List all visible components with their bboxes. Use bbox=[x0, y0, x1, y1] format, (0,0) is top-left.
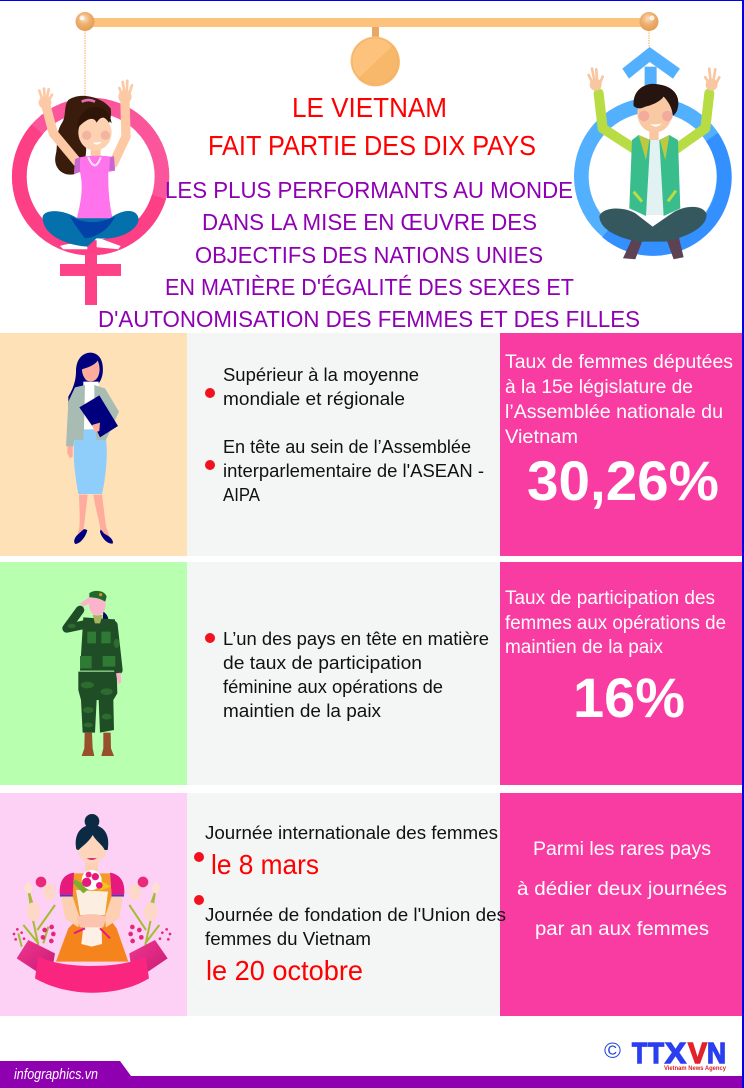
callout: two days: Parmi les rares pays bbox=[533, 839, 711, 860]
bullet text: peacekeeping: maintien de la paix bbox=[223, 701, 381, 721]
callout: 30,26%: Vietnam bbox=[505, 427, 578, 448]
title lines: purple: OBJECTIFS DES NATIONS UNIES bbox=[195, 242, 543, 268]
callout: 30,26%: l’Assemblée nationale du bbox=[505, 402, 723, 423]
icon: businesswoman bbox=[66, 353, 119, 544]
bullet text: peacekeeping: féminine aux opérations de bbox=[223, 677, 443, 697]
panel: peacekeeping bbox=[0, 562, 742, 785]
text: women's days dates: Journée de fondation de l'Union des bbox=[205, 905, 506, 925]
bullet text: parliament bbox=[205, 365, 484, 505]
title lines: purple: DANS LA MISE EN ŒUVRE DES bbox=[202, 209, 537, 235]
bullet text: parliament: AIPA bbox=[223, 485, 260, 505]
icon: man in male symbol bbox=[581, 47, 724, 259]
callout: two days: par an aux femmes bbox=[535, 919, 709, 940]
footer band bbox=[0, 1061, 742, 1088]
text: women's days dates: Journée internationale des femmes bbox=[205, 823, 498, 843]
bullet text: peacekeeping: L’un des pays en tête en matière bbox=[223, 629, 489, 649]
panel: women's days bbox=[0, 793, 742, 1016]
text: women's days dates: le 8 mars bbox=[211, 849, 319, 880]
logo: TTXVN: T bbox=[648, 1038, 664, 1070]
callout: 16%: Taux de participation des bbox=[505, 588, 715, 609]
callout: 30,26%: Taux de femmes députées bbox=[505, 352, 733, 373]
title lines: purple: D'AUTONOMISATION DES FEMMES ET DES FILLES bbox=[98, 306, 640, 332]
title line: red: FAIT PARTIE DES DIX PAYS bbox=[208, 130, 536, 161]
callout: two days bbox=[517, 839, 727, 940]
text: women's days dates bbox=[194, 823, 506, 986]
text: women's days dates: femmes du Vietnam bbox=[205, 929, 371, 949]
bullet text: peacekeeping bbox=[205, 629, 489, 721]
callout: 16%: maintien de la paix bbox=[505, 637, 663, 658]
callout: 30,26%: à la 15e législature de bbox=[505, 377, 693, 398]
callout: two days: à dédier deux journées bbox=[517, 879, 727, 900]
title line: red bbox=[208, 92, 536, 161]
logo: TTXVN: T bbox=[632, 1038, 647, 1070]
logo: TTXVN: X bbox=[665, 1038, 687, 1070]
title lines: purple: EN MATIÈRE D'ÉGALITÉ DES SEXES ET bbox=[165, 274, 574, 300]
icon: balance scale bbox=[76, 12, 658, 97]
title lines: purple: LES PLUS PERFORMANTS AU MONDE bbox=[165, 177, 573, 203]
callout: 30,26% bbox=[505, 352, 733, 512]
title line: red: LE VIETNAM bbox=[292, 92, 447, 123]
callout: 16%: femmes aux opérations de bbox=[505, 613, 726, 634]
bullet text: parliament: En tête au sein de l’Assemblée bbox=[223, 437, 471, 457]
icon: soldier bbox=[67, 591, 121, 756]
icon: woman in female symbol bbox=[19, 81, 162, 305]
icon: woman with flowers bbox=[13, 814, 171, 993]
title bbox=[98, 92, 640, 332]
bullet text: parliament: mondiale et régionale bbox=[223, 389, 405, 409]
callout: 30,26%: 30,26% bbox=[527, 449, 719, 512]
callout: 16% bbox=[505, 588, 726, 729]
logo: TTXVN: © bbox=[604, 1038, 621, 1063]
title lines: purple bbox=[98, 177, 640, 332]
logo: TTXVN: V bbox=[688, 1038, 708, 1070]
logo: TTXVN: N bbox=[707, 1038, 726, 1070]
logo: TTXVN: Vietnam News Agency bbox=[664, 1065, 726, 1072]
bullet text: parliament: interparlementaire de l'ASEAN - bbox=[223, 461, 484, 481]
source label: infographics.vn bbox=[14, 1066, 98, 1083]
logo: TTXVN bbox=[604, 1038, 726, 1072]
callout: 16%: 16% bbox=[573, 666, 685, 729]
bullet text: parliament: Supérieur à la moyenne bbox=[223, 365, 419, 385]
text: women's days dates: le 20 octobre bbox=[206, 955, 363, 986]
bullet text: peacekeeping: de taux de participation bbox=[223, 653, 422, 673]
panel: parliament bbox=[0, 333, 742, 556]
